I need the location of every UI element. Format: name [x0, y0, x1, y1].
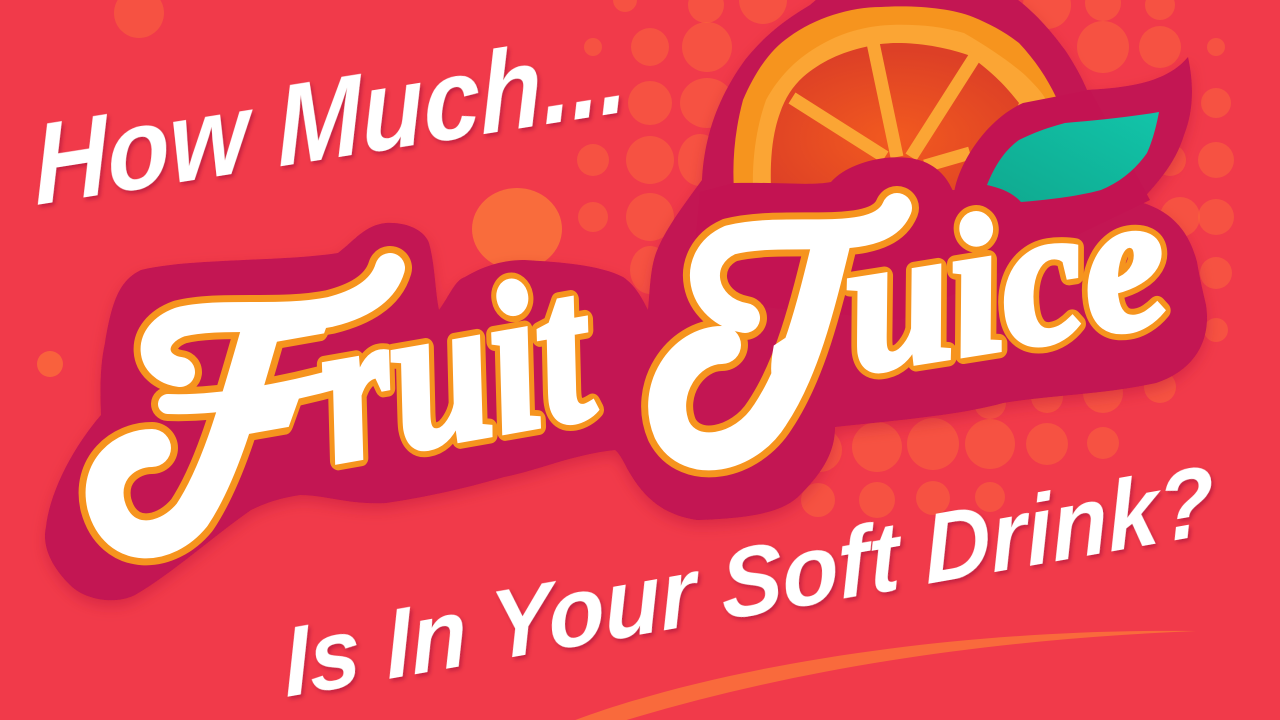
word: Juice fill: uice: [828, 148, 1181, 414]
swoosh underline: [570, 631, 1196, 720]
word: Fruit fill: ruit: [301, 228, 611, 507]
heading: How Much: How Much...: [31, 9, 630, 230]
word: Fruit fill: F: [165, 240, 351, 574]
word: Juice fill: J: [752, 185, 856, 430]
leaf: [987, 112, 1159, 202]
word: Fruit fill: [105, 228, 611, 574]
slice pith: [753, 25, 1046, 190]
word: Juice fill: [667, 148, 1181, 451]
orange slice: [733, 6, 1056, 190]
halftone dots: [37, 0, 1234, 518]
slice segments: [792, 38, 976, 166]
word: Fruit outline: ruit: [301, 228, 611, 507]
word: Juice outline: [667, 148, 1181, 451]
word: Fruit outline: [105, 228, 611, 574]
subtitle: Is In Your Soft Drink: Is In Your Soft Drink?: [280, 444, 1218, 718]
crimson backing shape: [45, 0, 1207, 600]
word: Fruit outline: F: [165, 240, 351, 574]
word: Juice outline: uice: [828, 148, 1181, 414]
slice pulp: [771, 43, 1019, 190]
crimson cover over slice base: [690, 90, 1150, 320]
title: Fruit Juice: [105, 148, 1181, 574]
slice rind: [733, 6, 1056, 190]
